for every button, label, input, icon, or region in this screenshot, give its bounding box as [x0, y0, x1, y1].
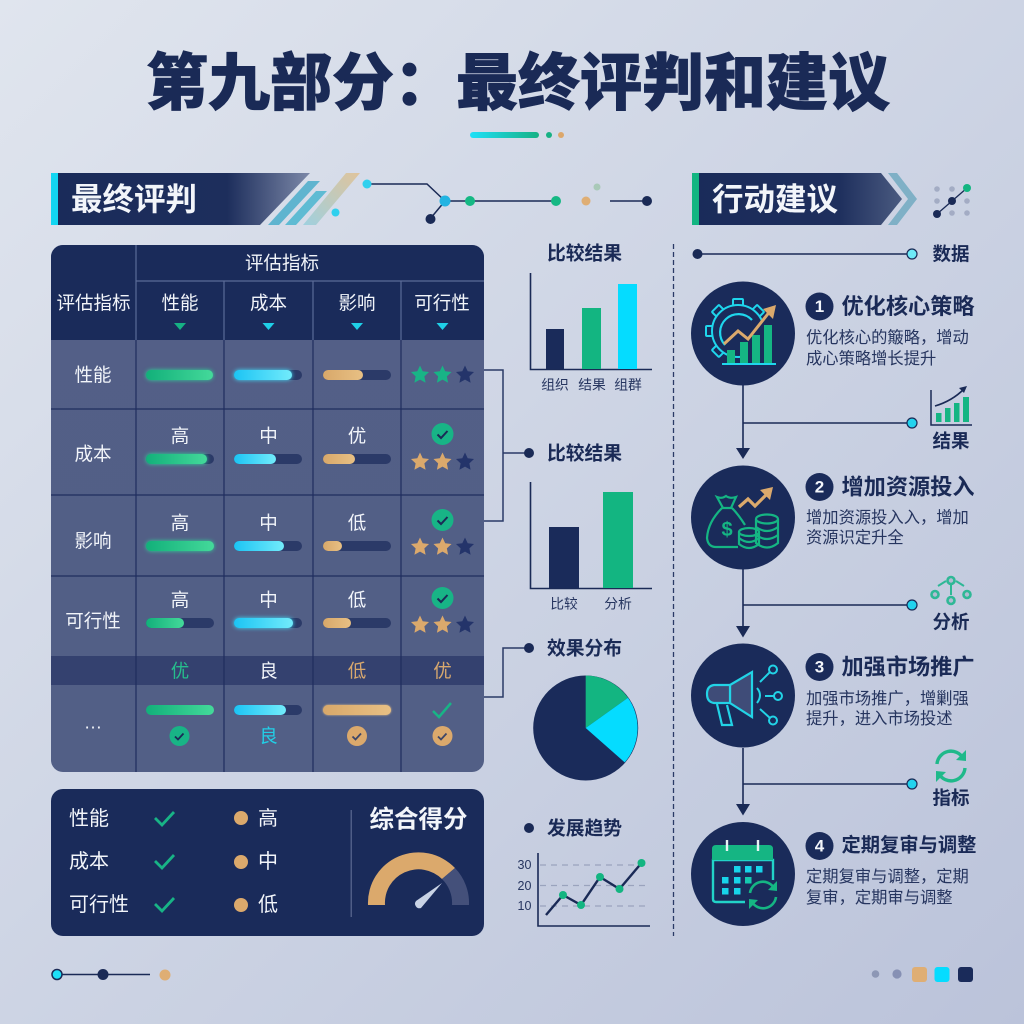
label: 分析: 分析	[932, 612, 970, 632]
step 3 body	[806, 690, 969, 728]
legend labels: 可行性	[69, 893, 129, 916]
chart: 比较结果 1: 组群	[614, 378, 642, 392]
network decoration	[362, 180, 652, 224]
row 2: 成本: 高	[171, 426, 189, 446]
dots decoration	[933, 184, 971, 218]
header labels: 影响	[338, 292, 376, 314]
table header background	[51, 245, 484, 340]
step 1 badge	[806, 292, 834, 320]
row 1: 性能	[146, 366, 474, 383]
row labels: 影响	[74, 530, 112, 552]
title: 第九部分：最终评判和建议	[146, 50, 890, 118]
chart: 比较结果 1: 结果	[578, 378, 606, 392]
last row	[146, 703, 452, 746]
legend labels: 成本	[69, 850, 109, 873]
step 4 badge	[806, 832, 834, 860]
header labels: 评估指标	[56, 292, 131, 314]
chart: 发展趋势 line: 发展趋势	[547, 816, 622, 838]
row 3: 影响: 低	[348, 512, 366, 534]
step 1 body: 优化核心的簸略，增动	[806, 329, 969, 347]
evaluation table	[51, 245, 484, 772]
table to chart connectors	[484, 370, 534, 697]
analysis icon	[932, 577, 970, 604]
step 3 body: 提升，进入市场投述	[806, 710, 953, 728]
chart: 发展趋势 line	[518, 816, 650, 926]
chart: 发展趋势 line: 30	[518, 858, 531, 872]
sync icon	[936, 750, 966, 782]
step 3 badge: 3	[815, 658, 824, 676]
step 4 body: 定期复审与调整，定期	[806, 868, 969, 886]
step 1 body	[806, 329, 969, 368]
row 3: 影响: 中	[259, 512, 278, 534]
row 4: 可行性: 高	[171, 590, 189, 610]
row 4: 可行性	[146, 587, 474, 633]
label: 结果: 结果	[932, 430, 970, 452]
row 4: 可行性: 中	[259, 590, 278, 610]
row labels: …	[84, 712, 102, 732]
header labels: 成本	[250, 292, 287, 314]
footer timeline	[52, 969, 170, 980]
divider	[350, 810, 352, 917]
data link row	[692, 244, 970, 264]
chart: 发展趋势 line: 10	[518, 899, 531, 913]
legend labels	[69, 807, 278, 916]
section header: 最终评判	[51, 173, 360, 225]
row 3: 影响: 高	[171, 512, 189, 534]
step 2 badge: 2	[815, 478, 824, 496]
step 2 body: 增加资源投入入，增加	[806, 509, 969, 527]
step 4 heading: 定期复审与调整	[842, 834, 976, 856]
row 2: 成本: 优	[348, 426, 366, 446]
step 1 badge: 1	[815, 297, 824, 316]
step 3 body: 加强市场推广，增剿强	[806, 690, 969, 708]
step 4 body	[806, 868, 969, 907]
summary band ratings: 优	[433, 660, 452, 682]
summary band ratings: 良	[259, 660, 278, 682]
step 4 icon: calendar	[691, 822, 795, 926]
section header: 行动建议	[692, 173, 917, 225]
header labels: 评估指标	[245, 252, 319, 274]
legend labels: 性能	[69, 807, 109, 830]
row labels: 成本	[74, 444, 112, 464]
header triangles	[174, 323, 448, 330]
label: 指标: 指标	[932, 788, 970, 808]
summary panel	[51, 789, 484, 936]
chart: 比较结果 2	[530, 442, 652, 612]
chart: 比较结果 1: 比较结果	[547, 242, 622, 264]
chart: 发展趋势 line: 20	[518, 879, 531, 893]
chart: 效果分布 pie: 效果分布	[547, 638, 622, 658]
gauge	[368, 852, 469, 908]
summary band ratings: 低	[348, 660, 366, 682]
chart: 效果分布 pie	[533, 638, 638, 780]
chart: 比较结果 2: 比较	[550, 596, 578, 612]
legend dots	[234, 811, 248, 912]
step 4 body: 复审，定期审与调整	[806, 889, 953, 907]
flow connectors	[736, 385, 917, 816]
step 2 body	[806, 509, 969, 547]
row 4: 可行性: 低	[348, 590, 366, 610]
check marks	[155, 812, 174, 911]
step 2 heading: 增加资源投入	[842, 474, 975, 500]
step 1 heading: 优化核心策略	[842, 294, 975, 319]
row labels	[65, 364, 121, 732]
step 2 badge	[806, 473, 834, 501]
step 3 heading: 加强市场推广	[842, 654, 975, 680]
summary band ratings	[171, 660, 452, 682]
step 1 icon: gear and growth	[691, 282, 795, 386]
header labels	[56, 252, 470, 314]
chart: 比较结果 1: 组织	[541, 378, 569, 392]
header labels: 性能	[161, 292, 199, 314]
step 2 body: 资源识定升全	[806, 529, 904, 547]
header labels: 可行性	[414, 292, 470, 314]
score heading: 综合得分	[370, 806, 468, 834]
row labels: 可行性	[65, 610, 121, 632]
last row: 良	[259, 726, 278, 746]
chart: 比较结果 2: 比较结果	[547, 442, 622, 464]
title accent	[470, 132, 564, 138]
section header: 行动建议: 行动建议	[712, 181, 839, 217]
result icon	[931, 386, 972, 425]
step 1 body: 成心策略增长提升	[806, 350, 936, 368]
legend labels: 中	[258, 850, 278, 873]
row 2: 成本: 中	[259, 426, 278, 446]
data link row: 数据	[932, 244, 970, 264]
grid lines	[51, 245, 484, 772]
table body	[51, 245, 484, 772]
section header: 最终评判: 最终评判	[71, 181, 197, 217]
legend labels: 高	[258, 807, 278, 830]
step 2 icon: money and coins: $	[721, 519, 733, 541]
step 3 badge	[806, 653, 834, 681]
row labels: 性能	[74, 364, 112, 386]
step 3 icon: megaphone	[691, 644, 795, 748]
legend labels: 低	[258, 893, 278, 916]
row 3: 影响	[146, 509, 474, 555]
chart: 比较结果 2: 分析	[604, 596, 632, 612]
row 2: 成本	[146, 423, 474, 470]
chart: 比较结果 1	[530, 242, 652, 392]
footer palette	[872, 967, 973, 982]
summary band ratings: 优	[171, 660, 189, 682]
column divider	[672, 244, 674, 936]
summary band	[51, 656, 484, 685]
step 4 badge: 4	[815, 836, 825, 856]
step 2 icon: money and coins	[691, 466, 795, 570]
